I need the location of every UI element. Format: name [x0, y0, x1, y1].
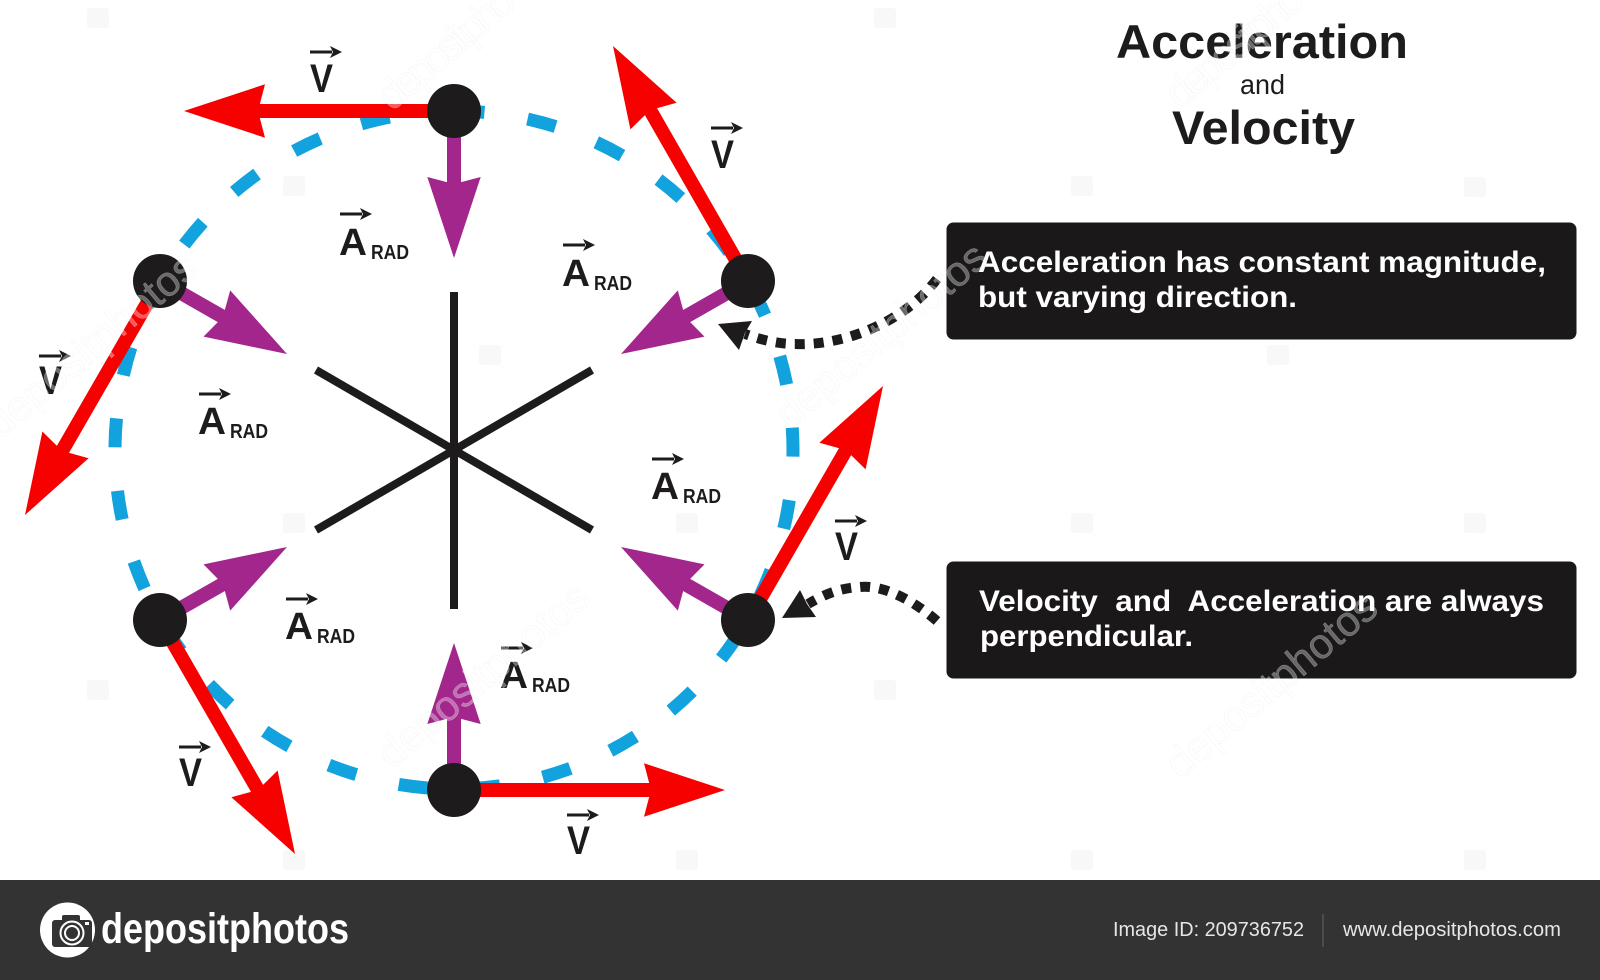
- velocity arrow: lower right: [748, 386, 883, 620]
- label: v top: V: [310, 57, 333, 101]
- acceleration arrow: lower left: [160, 547, 287, 620]
- label: A rad right: A: [651, 466, 679, 508]
- logo wordmark: depositphotos: [101, 905, 349, 953]
- label: v lower right: [835, 515, 867, 569]
- label: A rad lower left: A: [285, 606, 313, 648]
- label: A rad right: [651, 453, 721, 508]
- watermark: diagonal text: depositphotos: [368, 573, 598, 777]
- watermark: diagonal text: depositphotos: [766, 233, 996, 437]
- title line: Acceleration: Acceleration: [1116, 15, 1408, 68]
- title line: and: and: [1240, 69, 1285, 100]
- acceleration arrow: upper left: [160, 281, 287, 354]
- callout box: perpendicular: perpendicular.: [980, 620, 1193, 653]
- label: A rad left: RAD: [230, 421, 268, 443]
- acceleration arrow: bottom: [427, 643, 481, 790]
- callout box: acceleration magnitude: Acceleration has constant magnitude,: [978, 246, 1546, 279]
- website: www.depositphotos.com: [1342, 919, 1561, 941]
- label: A rad left: [198, 388, 268, 443]
- callout box: acceleration magnitude: but varying direction.: [978, 281, 1297, 314]
- label: A rad top: [339, 208, 409, 264]
- callout box: perpendicular: Velocity and Acceleration are always: [979, 585, 1544, 618]
- label: A rad bottom: [500, 642, 570, 697]
- centre star of lines: [316, 292, 592, 609]
- label: A rad top: RAD: [371, 242, 409, 264]
- velocity arrow: bottom: [454, 763, 725, 817]
- label: A rad lower left: RAD: [317, 626, 355, 648]
- label: A rad top: A: [339, 222, 367, 264]
- acceleration arrows: [160, 111, 748, 790]
- label: v upper right: [711, 122, 743, 177]
- callout arrow: magnitude note: [718, 279, 937, 350]
- acceleration arrow: top: [427, 111, 481, 258]
- label: v top: [310, 46, 342, 101]
- logo icon: camera in circle: [40, 902, 95, 958]
- moving particles: [133, 84, 775, 817]
- acceleration labels: [198, 208, 721, 697]
- label: v bottom: V: [567, 819, 590, 863]
- label: A rad bottom: A: [500, 655, 528, 697]
- watermark: camera icons: [87, 8, 1486, 870]
- velocity arrow: upper right: [613, 46, 748, 281]
- label: A rad right: RAD: [683, 486, 721, 508]
- velocity arrow: lower left: [160, 620, 295, 854]
- label: A rad bottom: RAD: [532, 675, 570, 697]
- title line: Velocity: Velocity: [1172, 101, 1355, 154]
- callout box: acceleration magnitude: [946, 222, 1576, 340]
- dashed circular path: [115, 111, 793, 789]
- label: v upper left: V: [39, 359, 62, 403]
- label: v upper left: [39, 350, 71, 403]
- callout box: perpendicular: [946, 562, 1576, 678]
- acceleration arrow: upper right: [621, 281, 748, 354]
- label: v lower left: V: [179, 751, 202, 795]
- label: v bottom: [567, 809, 599, 863]
- label: v lower left: [179, 741, 211, 795]
- watermark: diagonal text: [0, 0, 1386, 787]
- label: A rad left: A: [198, 401, 226, 443]
- label: v upper right: V: [711, 133, 734, 177]
- label: v lower right: V: [835, 525, 858, 569]
- label: A rad upper right: RAD: [594, 273, 632, 295]
- label: A rad upper right: [562, 239, 632, 295]
- velocity arrow: upper left: [25, 281, 160, 515]
- acceleration arrow: lower right: [621, 547, 748, 620]
- velocity labels: [39, 46, 867, 863]
- callout arrow: perpendicular note: [782, 587, 937, 621]
- velocity arrows: [25, 46, 883, 854]
- watermark: diagonal text: depositphotos: [1156, 583, 1386, 787]
- label: A rad lower left: [285, 593, 355, 648]
- image id: Image ID: 209736752: [1113, 919, 1304, 941]
- footer bar: [0, 880, 1600, 980]
- velocity arrow: top: [184, 84, 454, 138]
- footer separator: [1322, 914, 1324, 947]
- diagram: circular motion: [25, 46, 883, 863]
- title: [1116, 15, 1408, 154]
- label: A rad upper right: A: [562, 253, 590, 295]
